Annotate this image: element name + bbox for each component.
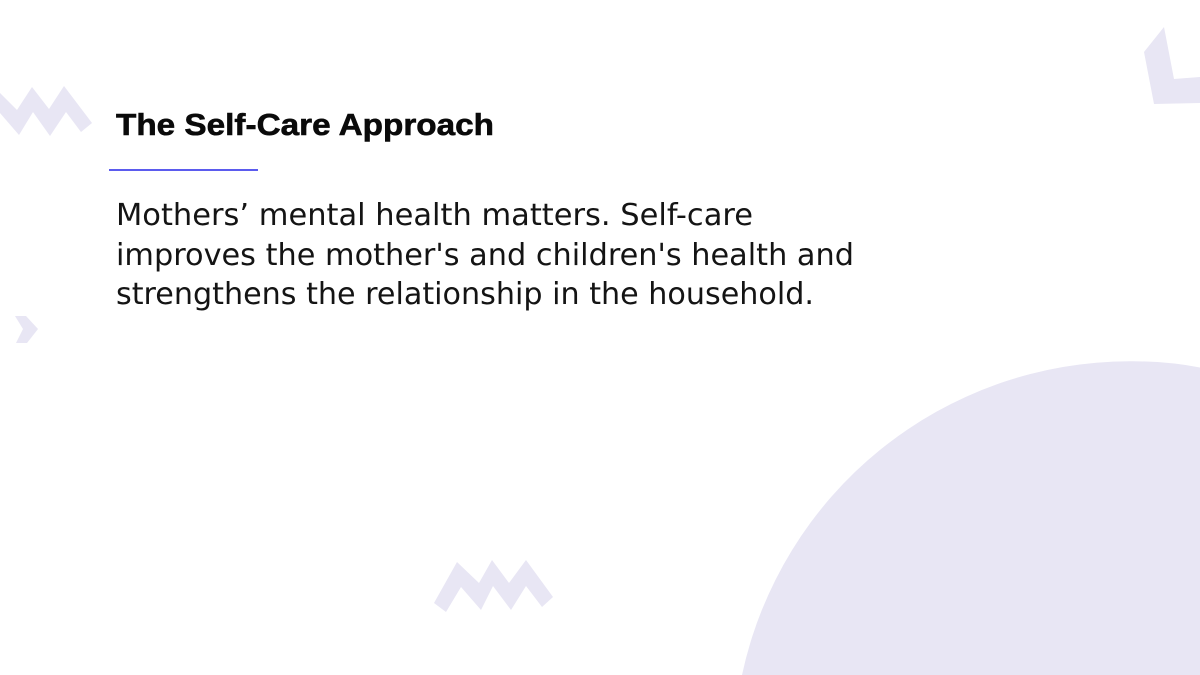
icon: zigzag, bottom centre	[434, 560, 553, 612]
title: The Self-Care Approach	[116, 107, 494, 142]
body text	[116, 198, 854, 312]
title underline	[109, 169, 258, 171]
decorative quarter circle, bottom right	[742, 361, 1200, 675]
icon: zigzag, top left	[0, 86, 92, 136]
body text: Mothers’ mental health matters. Self-care	[116, 198, 753, 233]
icon: small chevron, left	[15, 316, 38, 343]
body text: improves the mother's and children's health and	[116, 238, 854, 273]
icon: corner chevron, top right	[1144, 27, 1200, 104]
body text: strengthens the relationship in the household.	[116, 277, 814, 312]
